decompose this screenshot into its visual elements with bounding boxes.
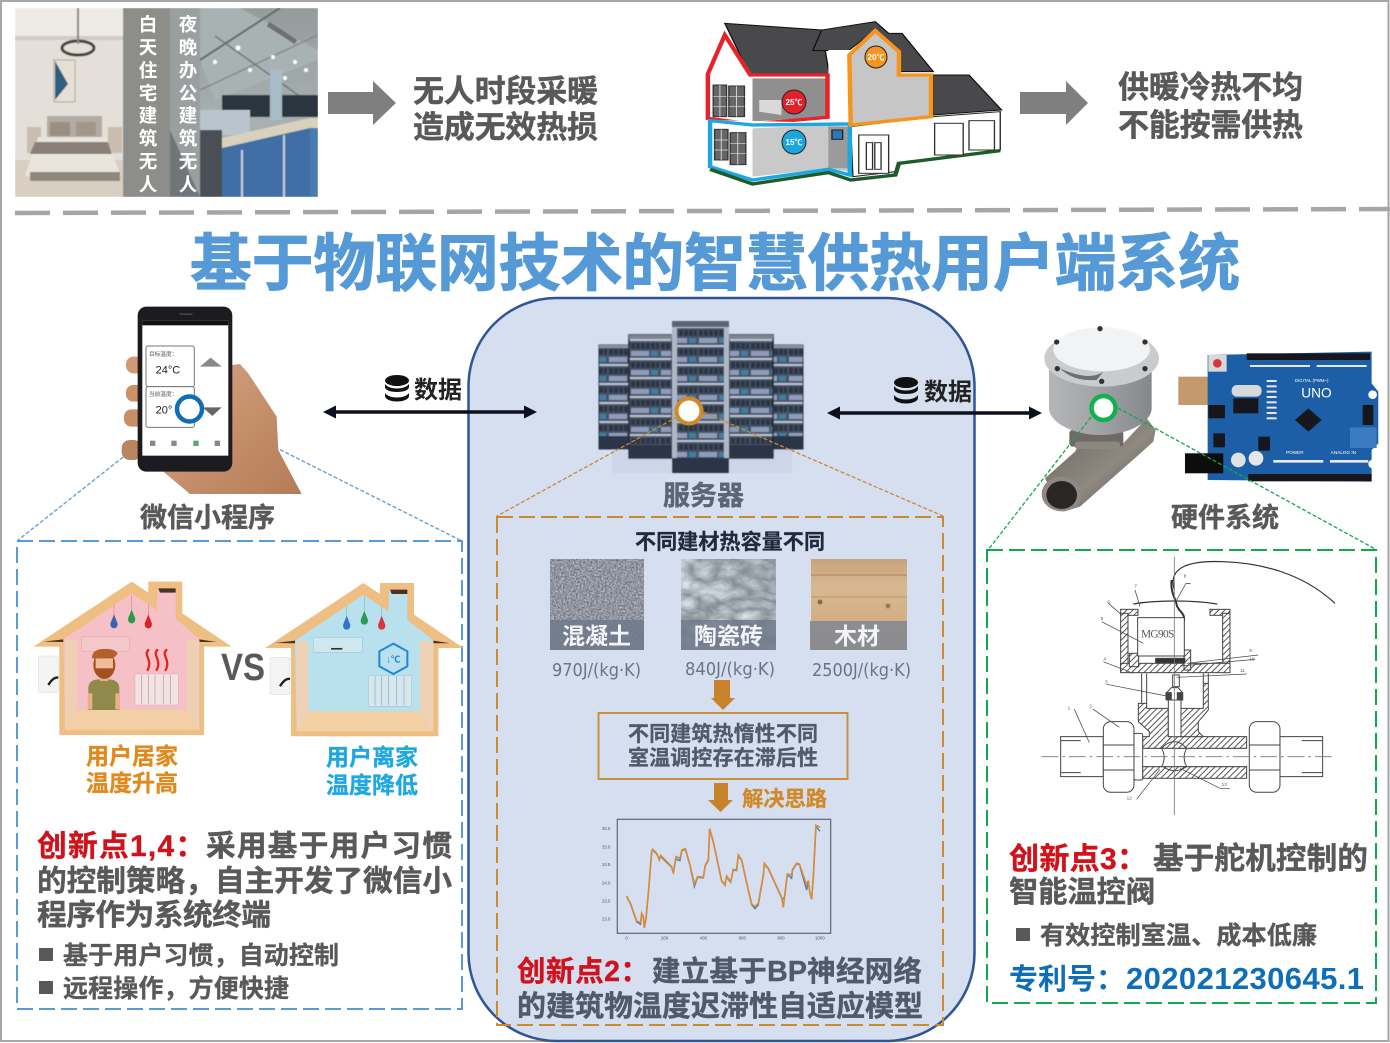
line chart: temperature prediction xyxy=(602,819,831,940)
heading: building material heat capacity: 不同建材热容量不同 xyxy=(635,530,825,554)
marker: green circle on valve xyxy=(1092,396,1116,420)
data label right: 数据 xyxy=(924,379,972,406)
bullet: valve benefit: 有效控制室温、成本低廉 xyxy=(1040,921,1317,950)
callout numbers of drawing: 6 xyxy=(1107,599,1110,604)
text: innovation points 1 and 4: 采用基于用户习惯 xyxy=(206,830,452,863)
values: specific heat capacity xyxy=(552,659,911,681)
panel: WeChat mini program frame xyxy=(17,412,462,1009)
phone label: current temperature: 当前温度： xyxy=(149,390,177,398)
label: VS: VS xyxy=(221,647,265,689)
callout numbers of drawing: 11 xyxy=(1240,668,1245,673)
temperature badge 15°C xyxy=(782,130,806,154)
callout numbers of drawing: 10 xyxy=(1249,657,1255,662)
material tile: concrete xyxy=(550,559,644,650)
vertical caption: nighttime office: 建 xyxy=(179,105,197,126)
text: innovation points 1 and 4: 程序作为系统终端 xyxy=(37,899,271,932)
panel: server (background) xyxy=(468,298,974,1041)
line chart: temperature prediction: 24.0 xyxy=(602,880,611,885)
text: problem two xyxy=(1118,70,1303,143)
temperature badge 15°C: 15℃ xyxy=(786,138,802,147)
vertical caption: daytime residence: 筑 xyxy=(139,128,158,149)
photo: residential and office buildings xyxy=(15,8,318,197)
vertical caption: daytime residence: 天 xyxy=(139,37,158,58)
double arrow: phone to server xyxy=(323,406,537,418)
panel: thermal inertia frame xyxy=(497,412,943,1025)
label: user away, temperature drops: 用户离家 xyxy=(326,744,418,770)
vertical caption: nighttime office: 无 xyxy=(179,151,197,172)
vertical caption: daytime residence: 无 xyxy=(139,151,157,172)
label: user away, temperature drops: 温度降低 xyxy=(326,772,418,798)
arrow: down to solution xyxy=(708,783,733,812)
vertical caption: daytime residence: 建 xyxy=(139,105,157,126)
bullet list: mini program features xyxy=(39,942,339,1003)
text: innovation point 2: 的建筑物温度迟滞性自适应模型 xyxy=(517,990,923,1023)
text: innovation point 3: 创新点3： xyxy=(1009,843,1147,876)
leader lines: valve to detail frame xyxy=(988,408,1377,550)
material tile: ceramic brick xyxy=(681,559,776,650)
icon: hand holding phone xyxy=(122,307,302,494)
temperature badge 25°C xyxy=(782,90,806,114)
vertical caption: nighttime office: 人 xyxy=(179,174,198,195)
text: innovation point 2: 建立基于BP神经网络 xyxy=(652,956,922,988)
callout numbers of drawing: 3 xyxy=(1105,679,1108,684)
line chart: temperature prediction: 0 xyxy=(625,935,628,940)
arrow: photo to problem one xyxy=(328,81,396,125)
callout numbers of drawing: 13 xyxy=(1222,782,1227,787)
board text: digital: DIGITAL (PWM~) xyxy=(1295,378,1329,383)
line chart: temperature prediction: 400 xyxy=(700,935,707,940)
vertical caption: daytime residence: 人 xyxy=(139,174,158,195)
text: problem one: 无人时段采暖 xyxy=(413,74,598,109)
text: problem one xyxy=(413,74,598,145)
text: innovation point 3: 智能温控阀 xyxy=(1009,876,1155,909)
label: hardware system: 硬件系统 xyxy=(1171,503,1279,533)
vertical caption: nighttime office: 办 xyxy=(179,60,198,81)
technical drawing: valve section xyxy=(1042,557,1335,815)
temperature badge 25°C: 25℃ xyxy=(786,98,802,107)
text: patent number: 专利号： xyxy=(1009,963,1125,996)
callout numbers of drawing: 5 xyxy=(1101,616,1104,621)
icon: cooling hexagon: ↓℃ xyxy=(386,655,401,665)
label: server: 服务器 xyxy=(663,481,744,511)
box: thermal inertia statement xyxy=(598,713,848,779)
label: user home, temperature rises: 用户居家 xyxy=(86,743,178,769)
line chart: temperature prediction: 200 xyxy=(661,935,669,940)
house with uneven room temperatures xyxy=(706,22,1002,184)
icon: cooling hexagon xyxy=(379,644,407,674)
text: problem two: 供暖冷热不均 xyxy=(1118,70,1303,105)
marker: orange circle on server xyxy=(676,398,702,424)
material tile: wood xyxy=(810,559,907,650)
phone label: target temperature: 目标温度： xyxy=(149,350,177,358)
line chart: temperature prediction: 600 xyxy=(739,935,746,940)
material tile: ceramic brick: 陶瓷砖 xyxy=(694,623,763,649)
temperature badge 20°C xyxy=(865,46,887,68)
panel: hardware frame xyxy=(987,550,1376,1003)
text: innovation point 3: 基于舵机控制的 xyxy=(1153,841,1368,876)
phone value: 24°C: 24°C xyxy=(156,364,180,376)
line chart: temperature prediction: 23.5 xyxy=(602,898,611,903)
phone value: 20°: 20° xyxy=(156,404,172,416)
text: problem one: 造成无效热损 xyxy=(413,110,598,145)
box: thermal inertia statement: 不同建筑热惰性不同 xyxy=(628,722,818,746)
icon: database xyxy=(894,377,918,404)
data label left xyxy=(385,375,462,404)
house: user home, temperature rises xyxy=(33,582,232,735)
board text: analog: ANALOG IN xyxy=(1331,450,1356,455)
vertical caption: nighttime office: 公 xyxy=(179,83,197,104)
line chart: temperature prediction: 25.0 xyxy=(602,844,611,849)
data label right xyxy=(894,377,972,406)
double arrow: server to hardware xyxy=(827,406,1042,420)
label: user away, temperature drops xyxy=(326,744,418,798)
callout numbers of drawing: 4 xyxy=(1103,657,1106,662)
values: specific heat capacity: 970J/(kg·K) xyxy=(552,660,641,681)
text: innovation point 2 xyxy=(517,956,923,1023)
callout numbers of drawing: 8 xyxy=(1184,574,1187,579)
text: innovation points 1 and 4: 的控制策略，自主开发了微信小 xyxy=(37,865,452,898)
label: user home, temperature rises: 温度升高 xyxy=(86,770,178,796)
callout numbers of drawing xyxy=(1068,574,1255,800)
label: solution idea: 解决思路 xyxy=(742,787,827,811)
vertical caption: daytime residence: 住 xyxy=(139,60,157,81)
text: innovation points 1 and 4: 创新点1,4： xyxy=(37,830,205,863)
callout numbers of drawing: 1 xyxy=(1068,705,1071,710)
line chart: temperature prediction: 23.0 xyxy=(602,916,611,921)
board text: power: POWER xyxy=(1286,450,1304,455)
text: patent number: 202021230645.1 xyxy=(1126,961,1364,996)
callout numbers of drawing: 9 xyxy=(1249,648,1252,653)
bullet list: mini program features: 基于用户习惯，自动控制 xyxy=(63,942,339,970)
label: user home, temperature rises xyxy=(86,743,178,796)
values: specific heat capacity: 840J/(kg·K) xyxy=(685,659,775,680)
icon: Arduino UNO board xyxy=(1178,352,1378,482)
marker: blue circle on phone xyxy=(177,396,202,422)
line chart: temperature prediction: 24.5 xyxy=(602,862,611,867)
icon: database xyxy=(385,375,409,402)
icon: server racks xyxy=(599,321,803,473)
text: innovation point 2: 创新点2： xyxy=(517,956,649,988)
line chart: temperature prediction: 1000 xyxy=(815,935,825,940)
material tile: concrete: 混凝土 xyxy=(562,623,631,649)
arrow: down to thermal inertia xyxy=(711,680,735,710)
values: specific heat capacity: 2500J/(kg·K) xyxy=(812,660,911,681)
text: problem two: 不能按需供热 xyxy=(1118,108,1303,143)
text: patent number xyxy=(1009,961,1364,996)
material tile: wood: 木材 xyxy=(834,623,880,649)
vertical caption: daytime residence: 白 xyxy=(139,14,157,35)
icon: man at home xyxy=(88,649,120,710)
icon: heat waves xyxy=(147,650,167,670)
box: thermal inertia statement: 室温调控存在滞后性 xyxy=(628,746,818,770)
temperature badge 20°C: 20℃ xyxy=(868,53,884,62)
data label left: 数据 xyxy=(414,377,462,404)
callout numbers of drawing: 2 xyxy=(1089,703,1092,708)
title: 基于物联网技术的智慧供热用户端系统 xyxy=(190,230,1240,299)
vertical caption: nighttime office: 筑 xyxy=(179,128,198,149)
servo label: MG90S: MG90S xyxy=(1141,628,1174,640)
text: innovation point 3 xyxy=(1009,841,1368,909)
bullet list: mini program features: 远程操作，方便快捷 xyxy=(63,974,289,1003)
text: innovation points 1 and 4 xyxy=(37,830,452,932)
callout numbers of drawing: 7 xyxy=(1134,583,1137,588)
house: user away, temperature drops xyxy=(265,583,463,736)
arrow: house to problem two xyxy=(1020,81,1088,125)
line chart: temperature prediction: 25.5 xyxy=(602,826,611,831)
label: WeChat mini program: 微信小程序 xyxy=(140,503,275,533)
board text: UNO: UNO xyxy=(1301,386,1332,401)
vertical caption: daytime residence: 宅 xyxy=(139,83,157,104)
line chart: temperature prediction: 800 xyxy=(777,935,785,940)
callout numbers of drawing: 12 xyxy=(1127,795,1132,800)
icon: smart valve xyxy=(1042,326,1159,512)
vertical caption: nighttime office: 夜 xyxy=(179,14,198,35)
vertical caption: nighttime office: 晚 xyxy=(179,37,198,58)
